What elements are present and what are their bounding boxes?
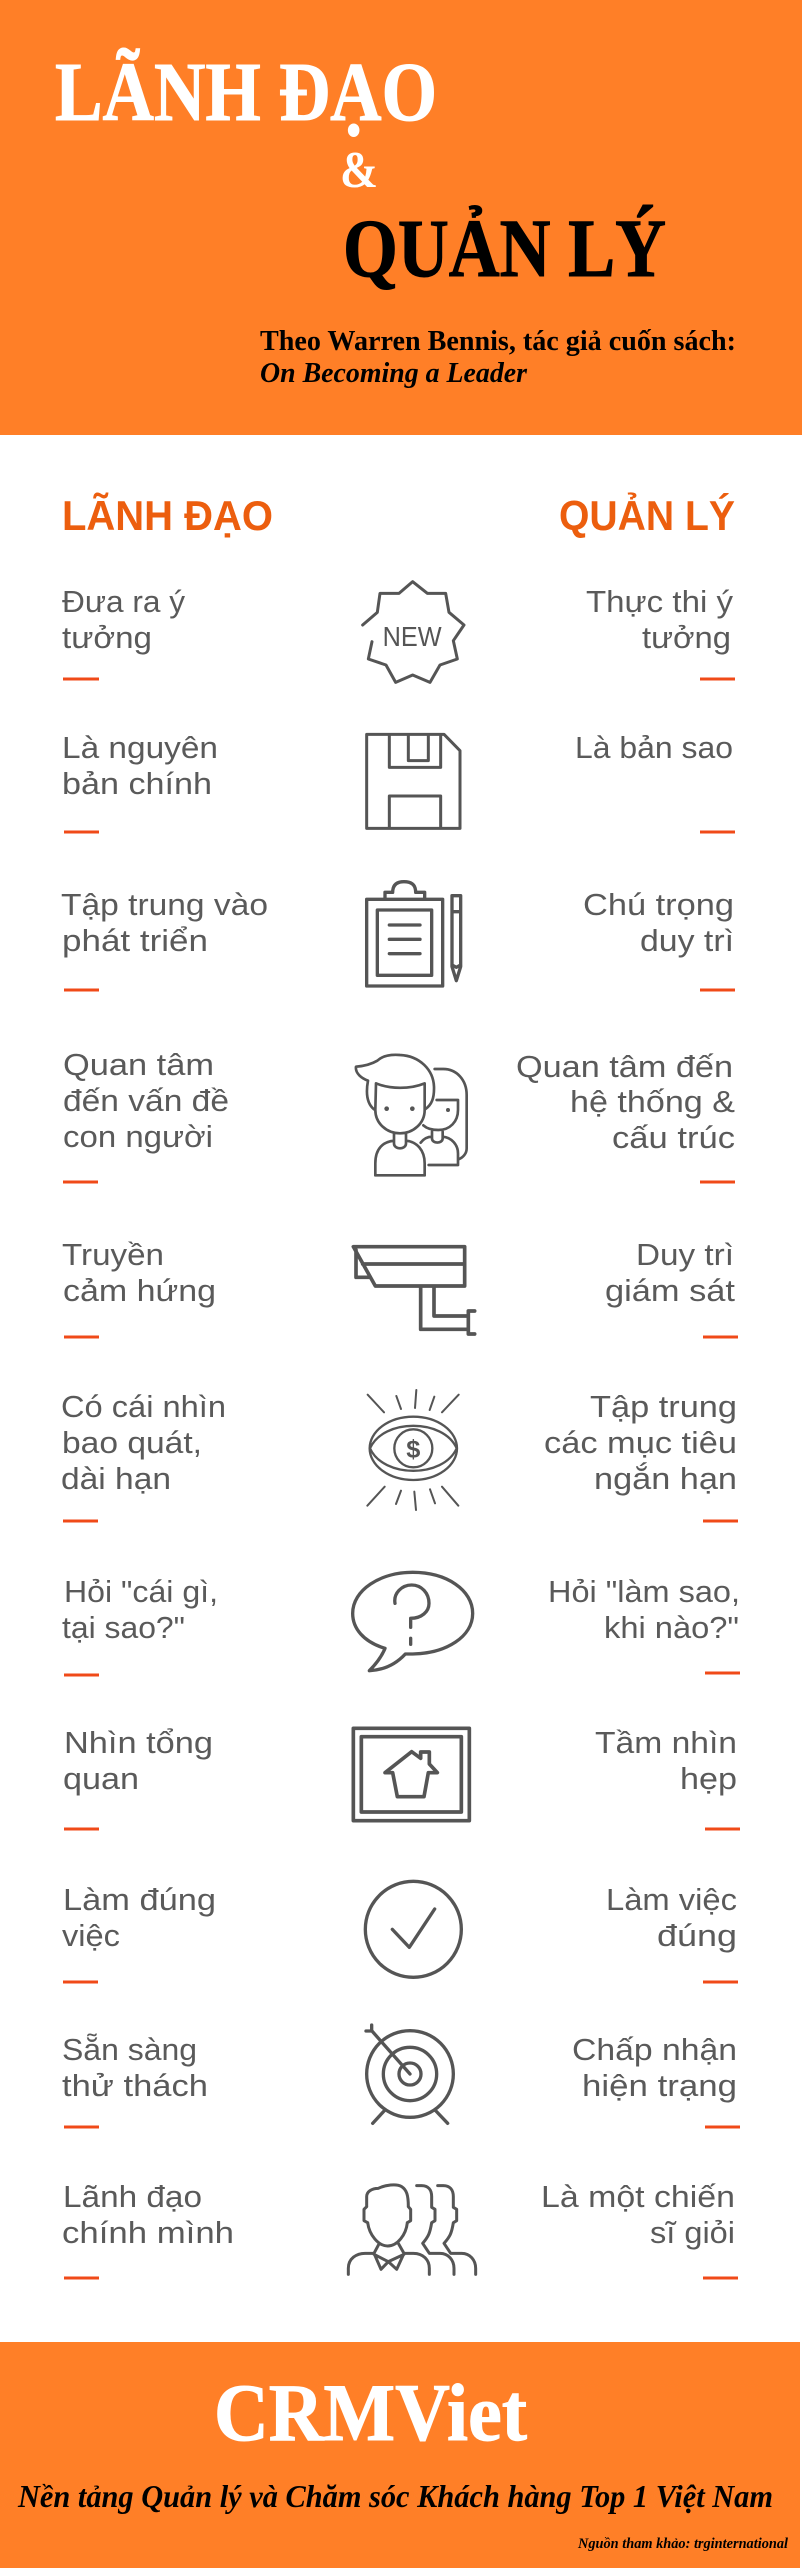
row 6: long term vs short term (61, 1389, 738, 1522)
manager text: Tập trung (590, 1389, 737, 1424)
manager text: Làm việc (606, 1882, 737, 1917)
icon: clipboard and pencil (367, 882, 461, 986)
leader text: Lãnh đạo (63, 2179, 202, 2214)
manager text: hiện trạng (582, 2068, 737, 2103)
panel: header banner (0, 0, 802, 435)
manager text (586, 584, 735, 680)
manager text: Hỏi "làm sao, (548, 1574, 740, 1609)
manager text: Duy trì (636, 1237, 734, 1272)
leader text (62, 2179, 234, 2280)
leader text: Hỏi "cái gì, (64, 1574, 218, 1609)
manager text: ngắn hạn (594, 1461, 737, 1496)
leader text: phát triển (62, 923, 208, 958)
leader text (62, 1237, 216, 1338)
manager text (516, 1049, 735, 1184)
row 1: ideas (62, 582, 735, 682)
leader text (62, 1574, 218, 1676)
icon: person with followers (348, 2185, 476, 2274)
manager text (606, 1882, 738, 1984)
manager text: giám sát (605, 1273, 735, 1308)
manager text: sĩ giỏi (650, 2215, 735, 2250)
manager text: Chú trọng (583, 887, 734, 922)
icon: security camera (353, 1247, 475, 1334)
icon: target with arrow (366, 2025, 453, 2123)
leader text: quan (63, 1761, 139, 1796)
leader text (62, 2032, 208, 2128)
row 4: people vs systems (63, 1047, 735, 1184)
leader text (62, 584, 186, 680)
leader text: Sẵn sàng (62, 2032, 197, 2067)
icon: speech bubble with question mark (353, 1572, 473, 1671)
row 11: self-led vs good soldier (62, 2179, 738, 2280)
icon: eye with dollar: $ (406, 1435, 420, 1463)
title: management: QUẢN LÝ (343, 202, 666, 294)
manager text: hẹp (680, 1761, 737, 1796)
leader text (63, 1725, 213, 1830)
column heading: management: QUẢN LÝ (559, 491, 735, 539)
manager text (548, 1574, 740, 1674)
leader text: đến vấn đề (63, 1083, 229, 1118)
manager text: Là bản sao (575, 730, 733, 765)
leader text: Quan tâm (63, 1047, 214, 1082)
column heading: leadership: LÃNH ĐẠO (62, 492, 273, 539)
row 3: develop vs maintain (61, 882, 735, 992)
row 8: big picture vs narrow view (63, 1725, 740, 1830)
manager text: tưởng (642, 620, 731, 655)
leader text: Là nguyên (62, 730, 218, 765)
brand name: CRMViet (214, 2367, 527, 2458)
row 10: challenge vs accept (62, 2025, 740, 2128)
row 2: original vs copy (62, 730, 735, 834)
leader text: việc (62, 1918, 120, 1953)
tagline: Nền tảng Quản lý và Chăm sóc Khách hàng Top 1 Việt Nam (17, 2478, 773, 2514)
icon: new badge: NEW (383, 621, 442, 652)
manager text: Là một chiến (541, 2179, 735, 2214)
leader text (62, 1882, 216, 1984)
manager text (541, 2179, 738, 2280)
subtitle: book title: On Becoming a Leader (260, 358, 528, 389)
leader text: Làm đúng (63, 1882, 216, 1917)
leader text (61, 1389, 226, 1522)
leader text: Truyền (62, 1237, 164, 1272)
icon: man and woman (356, 1055, 467, 1175)
leader text: Tập trung vào (61, 887, 268, 922)
leader text: tưởng (62, 620, 152, 655)
icon: eye with dollar (367, 1390, 459, 1510)
icon: new badge (363, 582, 464, 682)
leader text: chính mình (62, 2215, 234, 2250)
manager text: đúng (657, 1918, 737, 1953)
leader text (63, 1047, 229, 1184)
manager text: Quan tâm đến (516, 1049, 733, 1084)
icon: floppy disk (367, 734, 460, 828)
row 9: right thing vs thing right (62, 1881, 738, 1984)
manager text: Thực thi ý (586, 584, 734, 619)
manager text: hệ thống & (570, 1084, 735, 1119)
manager text (583, 887, 735, 992)
source note: Nguồn tham khảo: trginternational (577, 2536, 789, 2552)
leader text: thử thách (62, 2068, 208, 2103)
panel: footer banner (0, 2342, 800, 2568)
manager text (575, 730, 735, 834)
icon: check mark in circle (365, 1881, 461, 1977)
icon: framed house (353, 1728, 469, 1821)
title: leadership: LÃNH ĐẠO (55, 46, 437, 139)
manager text (605, 1237, 738, 1338)
title: ampersand: & (340, 142, 378, 199)
manager text: Tầm nhìn (595, 1725, 737, 1760)
manager text: duy trì (640, 923, 734, 958)
leader text: Có cái nhìn (61, 1389, 226, 1424)
leader text: con người (63, 1119, 213, 1154)
leader text: bản chính (62, 766, 212, 801)
leader text (62, 730, 218, 834)
manager text: Chấp nhận (572, 2032, 737, 2067)
leader text: bao quát, (62, 1425, 202, 1460)
leader text: Đưa ra ý (62, 584, 186, 619)
subtitle: author: Theo Warren Bennis, tác giả cuốn sách: (260, 326, 736, 357)
leader text: cảm hứng (63, 1273, 216, 1308)
manager text (544, 1389, 738, 1522)
manager text: khi nào?" (604, 1610, 739, 1645)
leader text (61, 887, 268, 992)
manager text: các mục tiêu (544, 1425, 737, 1460)
leader text: Nhìn tổng (64, 1725, 213, 1760)
manager text (572, 2032, 740, 2128)
leader text: dài hạn (61, 1461, 171, 1496)
row 5: inspire vs control (62, 1237, 738, 1338)
manager text: cấu trúc (612, 1120, 735, 1155)
leader text: tại sao?" (62, 1610, 185, 1645)
row 7: what why vs how when (62, 1572, 740, 1676)
manager text (595, 1725, 740, 1830)
